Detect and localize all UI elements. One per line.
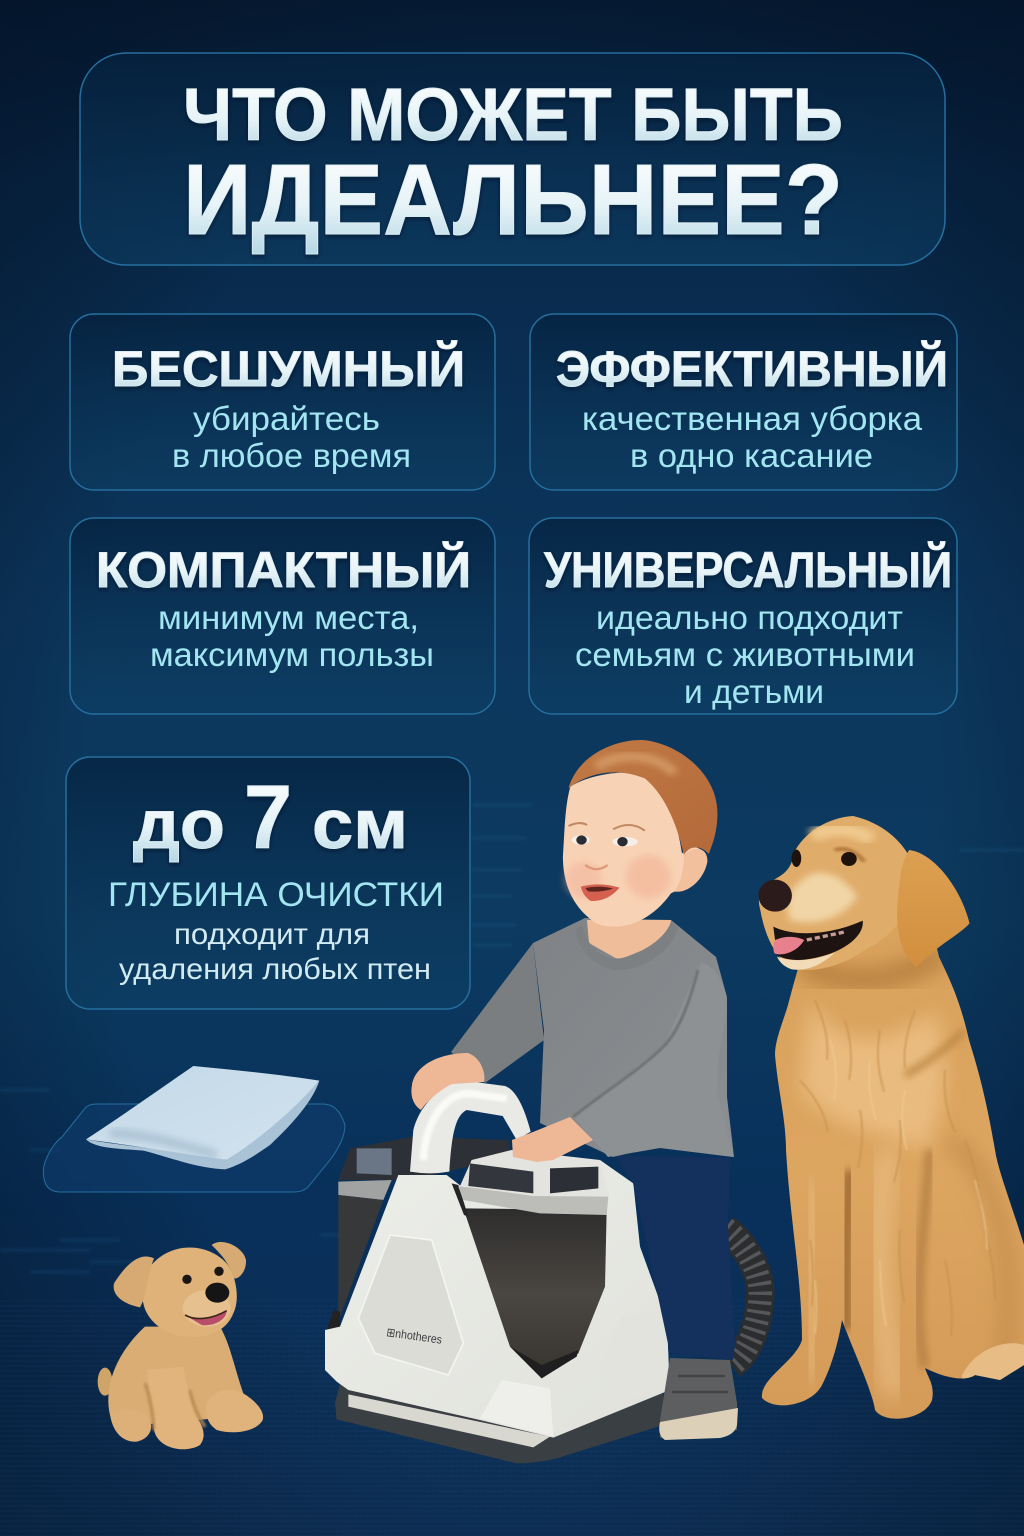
heading: universal: УНИВЕРСАЛЬНЫЙ xyxy=(544,541,952,598)
child ear xyxy=(675,849,707,892)
dog head xyxy=(758,816,970,970)
text: effective description: в одно касание xyxy=(630,437,873,474)
panel: effective xyxy=(530,314,957,490)
illustration: plush puppy toy xyxy=(98,1242,263,1449)
base plate xyxy=(335,1383,663,1463)
child face xyxy=(572,835,590,845)
text: universal description: семьям с животными xyxy=(575,636,915,673)
rear tank xyxy=(327,1137,512,1330)
child collar xyxy=(575,922,678,970)
text: cleaning depth description: подходит для xyxy=(174,918,370,951)
heading: compact: КОМПАКТНЫЙ xyxy=(96,541,471,598)
text: compact description xyxy=(150,599,434,673)
stat: up to 7 cm xyxy=(133,768,408,868)
toy head xyxy=(141,1247,237,1337)
text: effective description xyxy=(582,400,923,474)
panel: silent xyxy=(70,314,495,490)
pillow xyxy=(86,1066,319,1169)
brand label: ⊞nhotheres xyxy=(386,1325,443,1347)
dog nose and eyes xyxy=(758,880,792,912)
toy body xyxy=(108,1327,243,1427)
text: effective description: качественная уборка xyxy=(582,400,923,437)
child torso xyxy=(533,918,734,1157)
text: compact description: максимум пользы xyxy=(150,636,434,673)
toy rear leg xyxy=(110,1410,151,1442)
heading: title line 2: ИДЕАЛЬНЕЕ? xyxy=(183,144,843,256)
panel: compact xyxy=(70,518,495,714)
dog ear xyxy=(897,850,970,967)
text: cleaning depth description xyxy=(119,918,431,986)
shoe xyxy=(659,1358,738,1440)
side panel xyxy=(358,1235,463,1375)
illustration: pillow on carpet sample xyxy=(43,1066,345,1192)
handle xyxy=(410,1080,531,1173)
child near arm xyxy=(573,963,733,1157)
text: universal description xyxy=(575,599,915,710)
text: universal description: идеально подходит xyxy=(596,599,903,636)
child hands xyxy=(411,1053,593,1162)
text: silent description: убирайтесь xyxy=(193,400,380,437)
child far arm xyxy=(451,943,544,1083)
illustration: golden retriever xyxy=(758,816,1024,1430)
panel: title xyxy=(80,53,945,265)
toy ears xyxy=(114,1256,154,1307)
illustration: carpet cleaner xyxy=(325,1080,760,1463)
toy far paw xyxy=(206,1390,263,1432)
text: universal description: и детьми xyxy=(684,673,824,710)
stat: up to 7 cm: до xyxy=(133,785,225,863)
panel: universal xyxy=(529,518,957,714)
heading: effective: ЭФФЕКТИВНЫЙ xyxy=(556,340,948,397)
toy front leg xyxy=(145,1367,205,1449)
dog body xyxy=(760,920,1024,1430)
toy muzzle xyxy=(183,1290,231,1327)
heading: silent: БЕСШУМНЫЙ xyxy=(112,340,465,397)
child head xyxy=(563,740,717,927)
front tank xyxy=(452,1150,609,1378)
stat: up to 7 cm: 7 xyxy=(244,768,292,868)
dog mouth xyxy=(773,921,863,960)
panel: cleaning depth xyxy=(66,757,470,1009)
carpet sample xyxy=(43,1104,345,1192)
text: cleaning depth description: удаления любых птен xyxy=(119,953,431,986)
heading: title line 1: ЧТО МОЖЕТ БЫТЬ xyxy=(183,73,843,156)
hose xyxy=(725,1228,760,1365)
child neck xyxy=(587,920,671,960)
text: silent description xyxy=(172,400,411,474)
stat: up to 7 cm: см xyxy=(312,785,408,863)
main body xyxy=(325,1160,670,1438)
child hair xyxy=(568,740,717,855)
jeans xyxy=(615,1155,735,1360)
text: silent description: в любое время xyxy=(172,437,411,474)
text: cleaning depth label: ГЛУБИНА ОЧИСТКИ xyxy=(108,876,444,914)
illustration: child xyxy=(411,740,738,1440)
text: compact description: минимум места, xyxy=(158,599,419,636)
